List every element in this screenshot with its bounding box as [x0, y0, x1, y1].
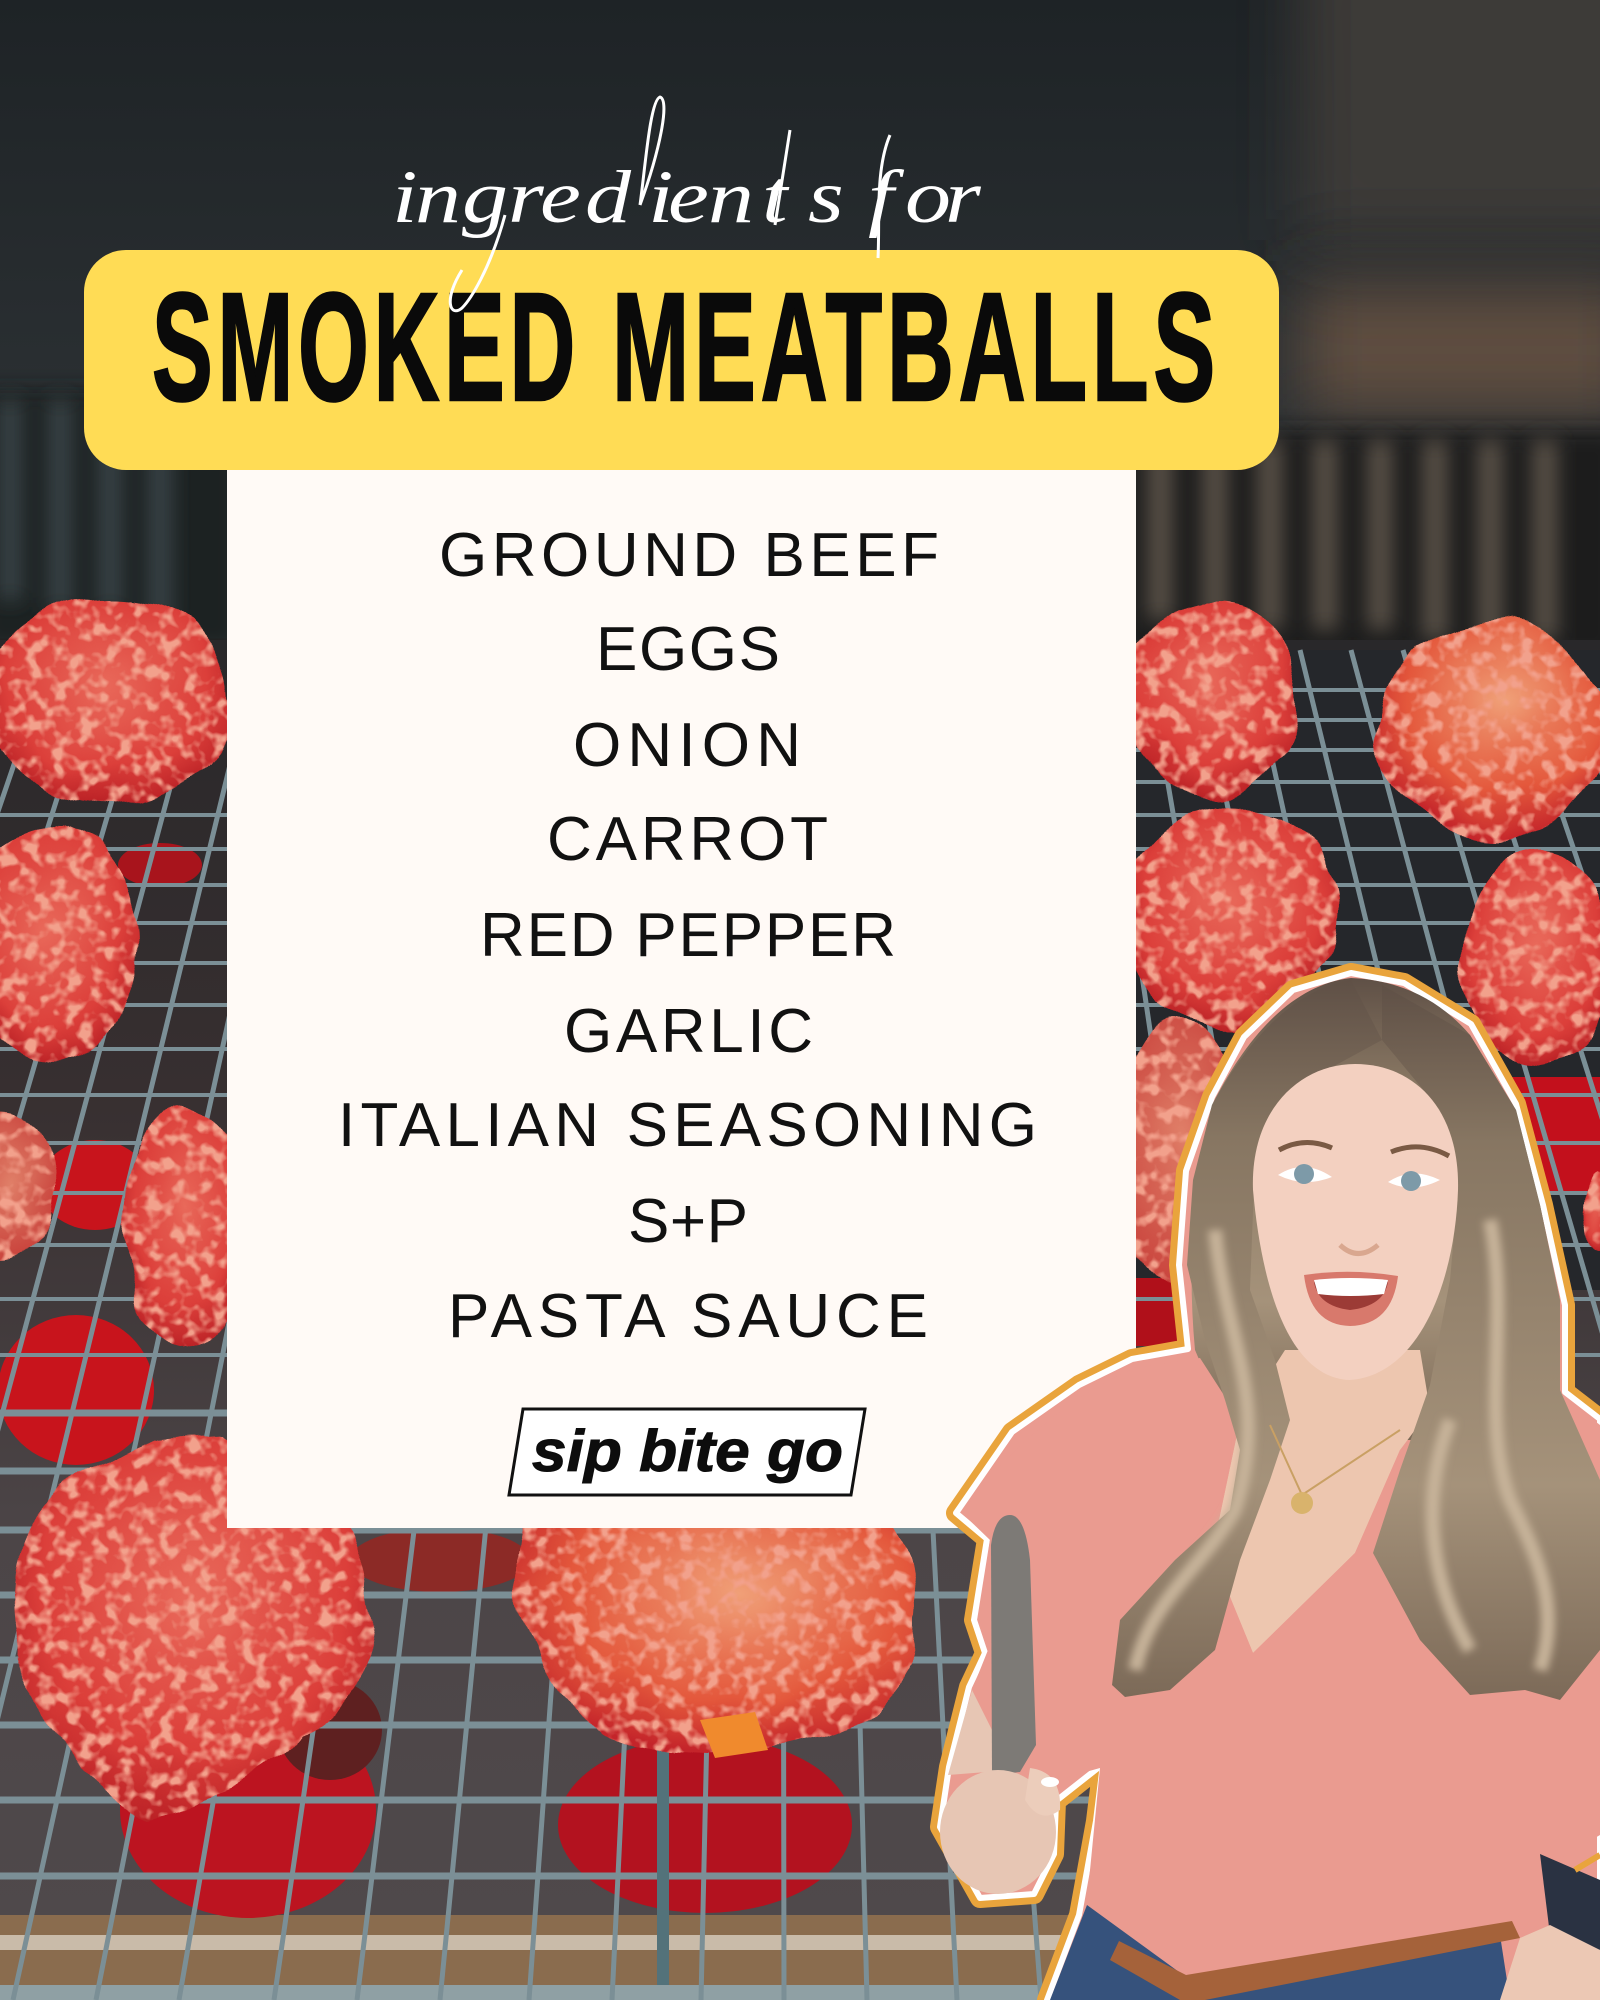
heading: script ingredients for	[392, 97, 981, 311]
sheet pan under the rack	[0, 640, 1600, 2000]
ingredient: garlic: GARLIC	[564, 997, 813, 1066]
logo: sip bite go	[509, 1409, 865, 1495]
heading: script ingredients for: ingredients for	[392, 156, 981, 239]
ingredient: ground beef: GROUND BEEF	[439, 521, 939, 590]
background: blurred smoker interior	[0, 0, 1600, 700]
ingredient list	[338, 521, 1037, 1351]
nose	[1340, 1245, 1378, 1254]
belt	[1110, 1921, 1520, 2000]
jeans	[1050, 1905, 1510, 2000]
meatballs	[0, 595, 1600, 1817]
ingredient: pasta sauce: PASTA SAUCE	[448, 1282, 928, 1351]
hair left	[1112, 980, 1382, 1697]
ingredient: red pepper: RED PEPPER	[480, 901, 896, 970]
face	[1253, 1064, 1458, 1380]
heading: smoked meatballs: MEATBALLS	[612, 261, 1220, 433]
ingredient: italian seasoning: ITALIAN SEASONING	[338, 1091, 1037, 1160]
ingredient: eggs: EGGS	[596, 615, 780, 684]
sauce pools	[0, 843, 1600, 1918]
title banner	[84, 250, 1279, 470]
cutout white inner edge	[940, 973, 1600, 2000]
ingredient: onion: ONION	[573, 711, 801, 780]
forearm	[948, 1690, 1012, 1775]
knife	[991, 1515, 1036, 1775]
ingredient: salt and pepper: S+P	[628, 1187, 748, 1256]
hair right	[1373, 985, 1600, 1700]
eyebrows	[1279, 1142, 1449, 1156]
photo cutout: woman holding knife	[940, 973, 1600, 2000]
mouth	[1304, 1272, 1398, 1326]
shirt	[962, 1358, 1600, 1975]
panel: ingredient card	[227, 470, 1136, 1528]
wire cooling rack	[0, 650, 1600, 2000]
eyes	[1278, 1164, 1440, 1191]
necklace	[1270, 1425, 1400, 1514]
neck and chest	[1212, 1350, 1430, 1653]
cutout outline	[940, 973, 1600, 2000]
logo: sip bite go: sip bite go	[532, 1419, 843, 1484]
ingredient: carrot: CARROT	[547, 805, 828, 874]
hair back	[1192, 978, 1560, 1440]
hair highlights	[1135, 1220, 1548, 1670]
watch and right hand	[1500, 1854, 1600, 2000]
heading: smoked meatballs	[152, 261, 1220, 433]
hand	[940, 1768, 1060, 1894]
heading: smoked meatballs: SMOKED	[152, 261, 580, 433]
